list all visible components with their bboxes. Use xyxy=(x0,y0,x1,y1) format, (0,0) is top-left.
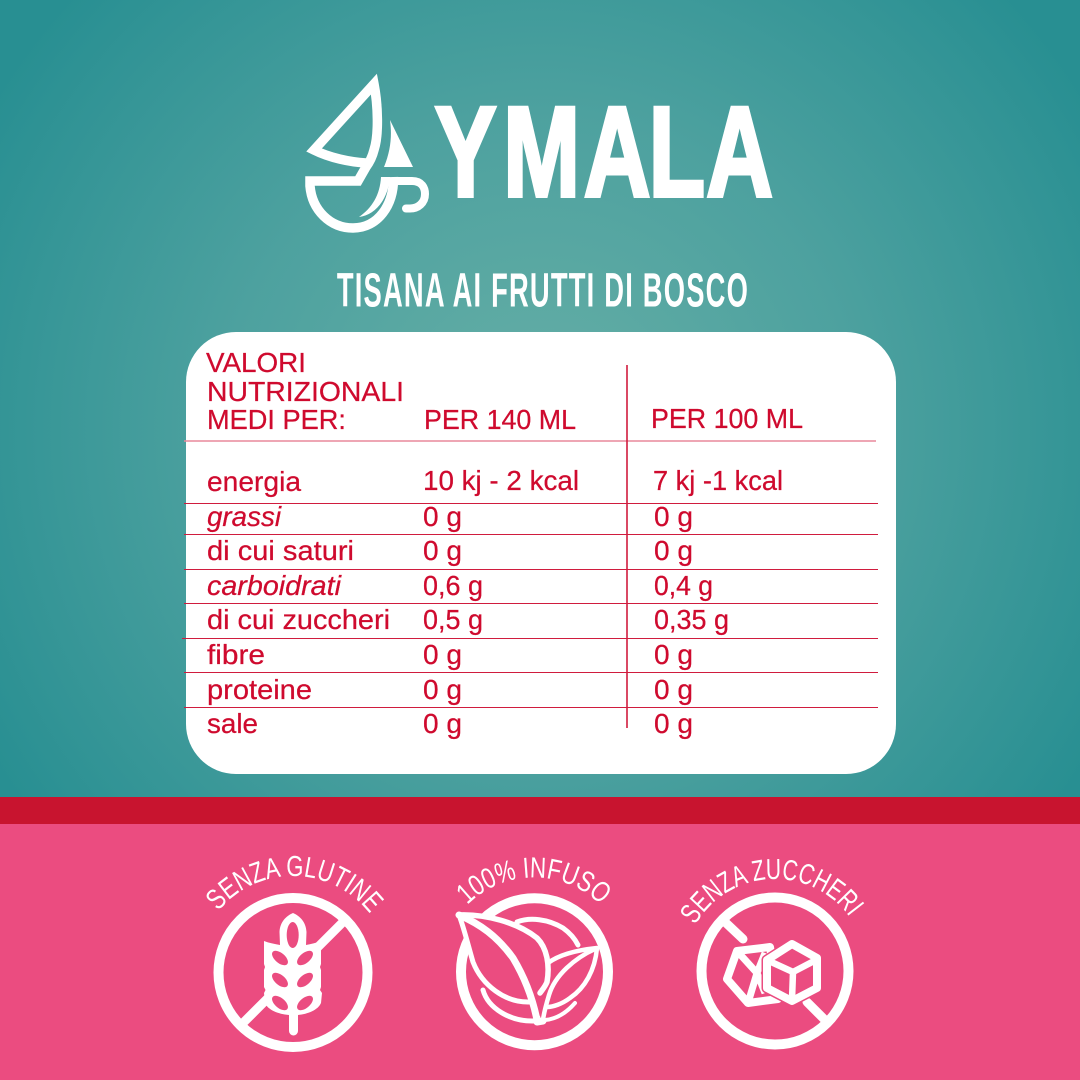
row: carboidrati: 0,4 g xyxy=(654,570,713,601)
row: di cui saturi: 0 g xyxy=(654,535,693,566)
row: di cui zuccheri: 0,35 g xyxy=(654,604,729,635)
table rules xyxy=(182,365,878,728)
panel: nutrition table xyxy=(182,332,896,774)
row: di cui zuccheri: 0,5 g xyxy=(423,604,483,635)
row: fibre xyxy=(207,639,693,670)
icon: leaves in circle xyxy=(459,898,608,1045)
badge: 100% infuso xyxy=(456,857,613,1050)
row: di cui zuccheri: di cui zuccheri xyxy=(207,604,390,635)
row: grassi xyxy=(207,501,693,532)
table card xyxy=(186,332,896,774)
badge label: SENZA GLUTINE xyxy=(206,856,384,913)
logo: Ymala xyxy=(310,80,773,228)
icon: crossed-out wheat xyxy=(218,898,368,1047)
row: carboidrati xyxy=(207,570,713,601)
teal gradient background xyxy=(0,0,1080,798)
badge: senza zuccheri xyxy=(681,859,864,1050)
table header: VALORI xyxy=(206,347,306,378)
row: fibre: 0 g xyxy=(654,639,693,670)
badge label: SENZA ZUCCHERI xyxy=(681,859,864,922)
row: carboidrati: carboidrati xyxy=(207,570,342,601)
brand name: YMALA xyxy=(435,80,773,224)
row: fibre: fibre xyxy=(207,639,265,670)
icon: crossed-out sugar cubes xyxy=(702,898,848,1044)
table header xyxy=(206,347,803,435)
row: di cui zuccheri xyxy=(207,604,729,635)
row: di cui saturi xyxy=(207,535,693,566)
row: sale: sale xyxy=(207,708,258,739)
red divider band xyxy=(0,797,1080,824)
row: energia: 10 kj - 2 kcal xyxy=(423,465,579,496)
row: fibre: 0 g xyxy=(423,639,462,670)
row: energia: energia xyxy=(207,466,301,497)
row: proteine xyxy=(207,674,693,705)
row: proteine: 0 g xyxy=(423,674,462,705)
table header: MEDI PER: xyxy=(207,404,346,435)
row: carboidrati: 0,6 g xyxy=(423,570,483,601)
row: energia xyxy=(207,465,783,497)
row: grassi: grassi xyxy=(207,501,282,532)
pink bottom panel xyxy=(0,824,1080,1080)
table header: NUTRIZIONALI xyxy=(207,376,404,407)
table header: PER 140 ML xyxy=(424,404,576,435)
row: proteine: proteine xyxy=(207,674,312,705)
row: proteine: 0 g xyxy=(654,674,693,705)
table header: PER 100 ML xyxy=(651,403,803,434)
row: sale xyxy=(207,708,693,739)
row: sale: 0 g xyxy=(423,708,462,739)
icon: sail and cup xyxy=(310,84,425,228)
badge: senza glutine xyxy=(206,856,384,1052)
row: grassi: 0 g xyxy=(654,501,693,532)
row: di cui saturi: 0 g xyxy=(423,535,462,566)
row: grassi: 0 g xyxy=(423,501,462,532)
row: di cui saturi: di cui saturi xyxy=(207,535,354,566)
badge label: 100% INFUSO xyxy=(458,857,610,904)
title: TISANA AI FRUTTI DI BOSCO xyxy=(337,265,748,318)
row: sale: 0 g xyxy=(654,708,693,739)
row: energia: 7 kj -1 kcal xyxy=(653,465,783,496)
